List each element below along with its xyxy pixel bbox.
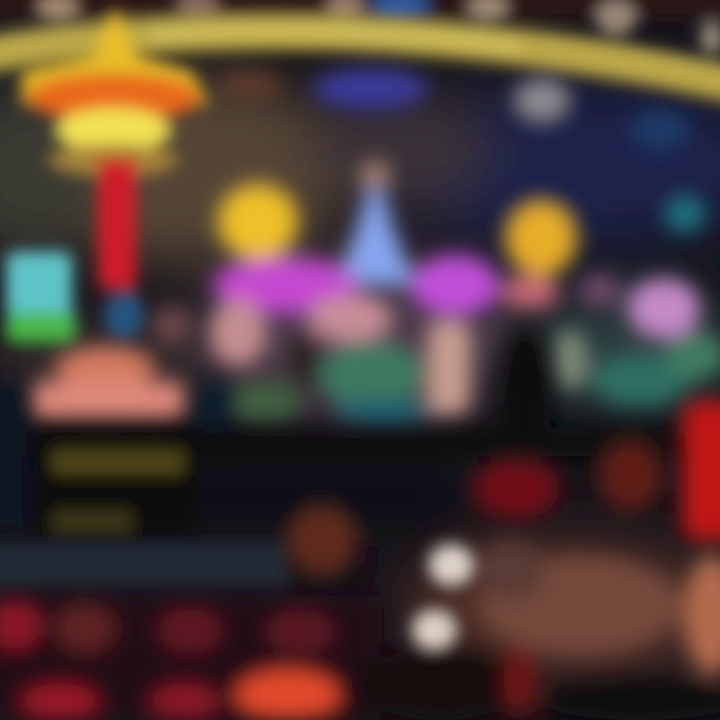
- sign line two: [52, 510, 132, 534]
- lamp lower tan: [49, 144, 177, 176]
- red hat: [472, 458, 560, 518]
- right side screens: [552, 196, 720, 406]
- white highlights: [412, 545, 473, 650]
- upper lights: [220, 68, 690, 150]
- central stage: [210, 161, 577, 426]
- dark figure centre: [289, 330, 321, 390]
- green floor: [320, 339, 424, 411]
- magenta canopies: [213, 257, 357, 313]
- blue castle: [335, 165, 415, 285]
- top strip with lights: [0, 0, 720, 54]
- dark silhouettes: [0, 323, 710, 530]
- pale pillar: [428, 320, 470, 415]
- sign line one: [52, 450, 184, 474]
- grey band: [0, 542, 290, 588]
- lamp orange dome: [27, 73, 199, 121]
- foreground crowd: [286, 400, 720, 720]
- red right block: [682, 400, 720, 540]
- red seats: [0, 596, 380, 720]
- gold arc: [0, 30, 720, 88]
- salmon stand: [30, 307, 192, 418]
- skin tone right: [684, 555, 720, 675]
- lamp yellow band: [55, 108, 171, 152]
- lamp tower: [22, 8, 208, 339]
- dark bottom shapes: [355, 650, 525, 720]
- lamp red pole: [98, 158, 136, 288]
- left teal screen: [6, 252, 76, 342]
- lamp blue base: [104, 291, 144, 339]
- tan shoulders: [480, 555, 680, 655]
- dark sign panel: [38, 430, 193, 535]
- lamp star top: [22, 8, 208, 104]
- brown hair figure: [286, 504, 358, 576]
- left yellow glow: [218, 184, 298, 260]
- right yellow glow: [505, 200, 577, 276]
- pink figures: [210, 298, 266, 366]
- orange-red seat: [236, 670, 340, 720]
